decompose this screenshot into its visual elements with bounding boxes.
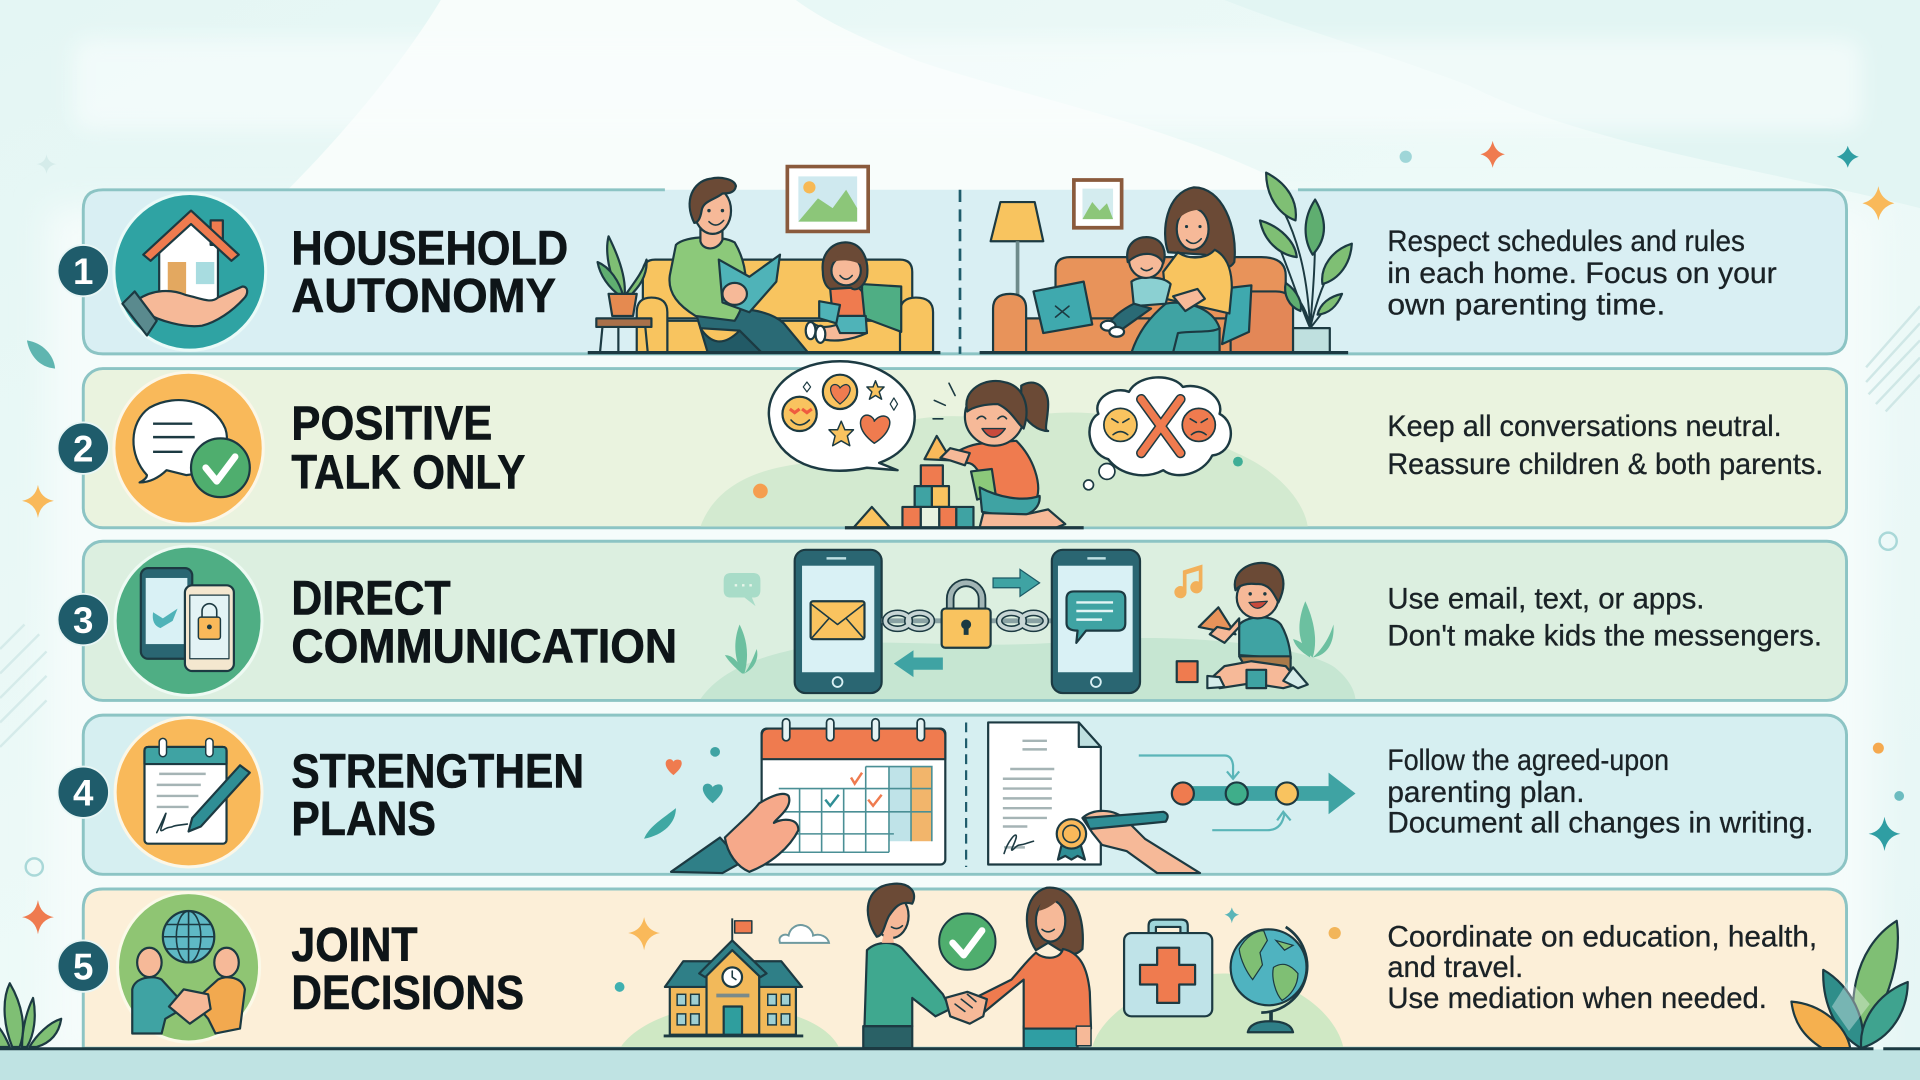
- heading: [291, 222, 568, 323]
- calendar with hand: [671, 719, 945, 873]
- panel: direct communication: [58, 541, 1847, 700]
- panel: strengthen plans: [58, 715, 1847, 874]
- accents: [615, 907, 1341, 992]
- ground line: [0, 1048, 1920, 1050]
- panel: positive talk only: [58, 361, 1847, 528]
- heading: POSITIVE: [291, 398, 492, 451]
- heading: STRENGTHEN: [291, 745, 584, 798]
- number badge 1: 1: [73, 251, 93, 292]
- description: Coordinate on education, health,: [1387, 921, 1817, 954]
- icon: globe and handshake: [118, 893, 260, 1042]
- scene: girl with blocks: [845, 381, 1084, 528]
- panel: household autonomy: [58, 167, 1847, 354]
- description: Use email, text, or apps.: [1387, 583, 1704, 616]
- globe on stand: [1231, 927, 1307, 1032]
- description: Don't make kids the messengers.: [1387, 619, 1822, 652]
- number badge 3: [58, 594, 109, 645]
- heading: [291, 919, 524, 1020]
- heading: [291, 745, 584, 846]
- heading: TALK ONLY: [291, 447, 525, 500]
- heading: [291, 573, 677, 673]
- background hill: [700, 412, 1308, 527]
- number badge 3: 3: [73, 600, 93, 641]
- scene: boy playing: [1174, 563, 1334, 688]
- first aid kit: [1124, 920, 1212, 1016]
- description: [1387, 744, 1813, 840]
- heading: AUTONOMY: [291, 270, 556, 323]
- phone with chat bubble: [1052, 550, 1140, 693]
- description: [1387, 583, 1822, 652]
- heading: JOINT: [291, 919, 418, 972]
- description: in each home. Focus on your: [1387, 257, 1777, 290]
- number badge 5: [58, 940, 109, 992]
- description: and travel.: [1387, 951, 1523, 984]
- timeline arrow: [1139, 756, 1356, 830]
- heading: DIRECT: [291, 573, 451, 626]
- background hill: [700, 638, 1356, 699]
- description: Respect schedules and rules: [1387, 225, 1745, 258]
- arrows between phones: [894, 569, 1040, 677]
- description: parenting plan.: [1387, 776, 1584, 809]
- accent chat and plant: [724, 573, 760, 673]
- signed document with ribbon: [988, 722, 1200, 873]
- description: own parenting time.: [1387, 289, 1665, 322]
- chained lock: [882, 583, 1053, 648]
- icon: two phones with lock: [115, 546, 262, 696]
- description: Keep all conversations neutral.: [1387, 410, 1782, 443]
- number badge 4: [58, 767, 109, 818]
- heading: DECISIONS: [291, 967, 524, 1020]
- panel: joint decisions: [58, 884, 1847, 1048]
- scene: parents shaking hands: [863, 884, 1091, 1048]
- description: [1387, 225, 1777, 322]
- description: Reassure children & both parents.: [1387, 448, 1823, 481]
- hearts and leaf: [644, 747, 723, 839]
- speech bubble with positive emoji: [769, 361, 915, 471]
- icon: notepad and pen: [115, 718, 262, 867]
- icon: speech bubble with check: [114, 372, 263, 524]
- plant: left corner leaves: [0, 983, 61, 1047]
- heading: PLANS: [291, 793, 436, 846]
- number badge 5: 5: [73, 947, 93, 988]
- heading: COMMUNICATION: [291, 620, 677, 673]
- scene: mother and son on sofa: [980, 173, 1352, 353]
- number badge 1: [58, 245, 109, 296]
- number badge 2: 2: [73, 429, 93, 470]
- number badge 4: 4: [73, 773, 94, 814]
- school building: [664, 918, 803, 1036]
- phone with envelope: [795, 550, 882, 693]
- thought cloud with negative emoji: [1084, 377, 1231, 490]
- description: [1387, 410, 1823, 481]
- heading: [291, 398, 525, 500]
- number badge 2: [58, 422, 109, 474]
- description: Use mediation when needed.: [1387, 982, 1767, 1015]
- background hills: [621, 973, 1343, 1047]
- description: Follow the agreed-upon: [1387, 744, 1669, 777]
- decorative sparkles and dots: [0, 141, 1920, 934]
- icon: house in hand: [114, 193, 266, 350]
- divider: [965, 722, 967, 867]
- plant: right corner leaves: [1791, 921, 1908, 1048]
- accent dots: [753, 457, 1243, 498]
- description: [1387, 921, 1817, 1015]
- description: Document all changes in writing.: [1387, 807, 1813, 840]
- divider: [959, 190, 961, 354]
- scene: father and daughter on sofa: [588, 167, 940, 353]
- heading: HOUSEHOLD: [291, 222, 568, 275]
